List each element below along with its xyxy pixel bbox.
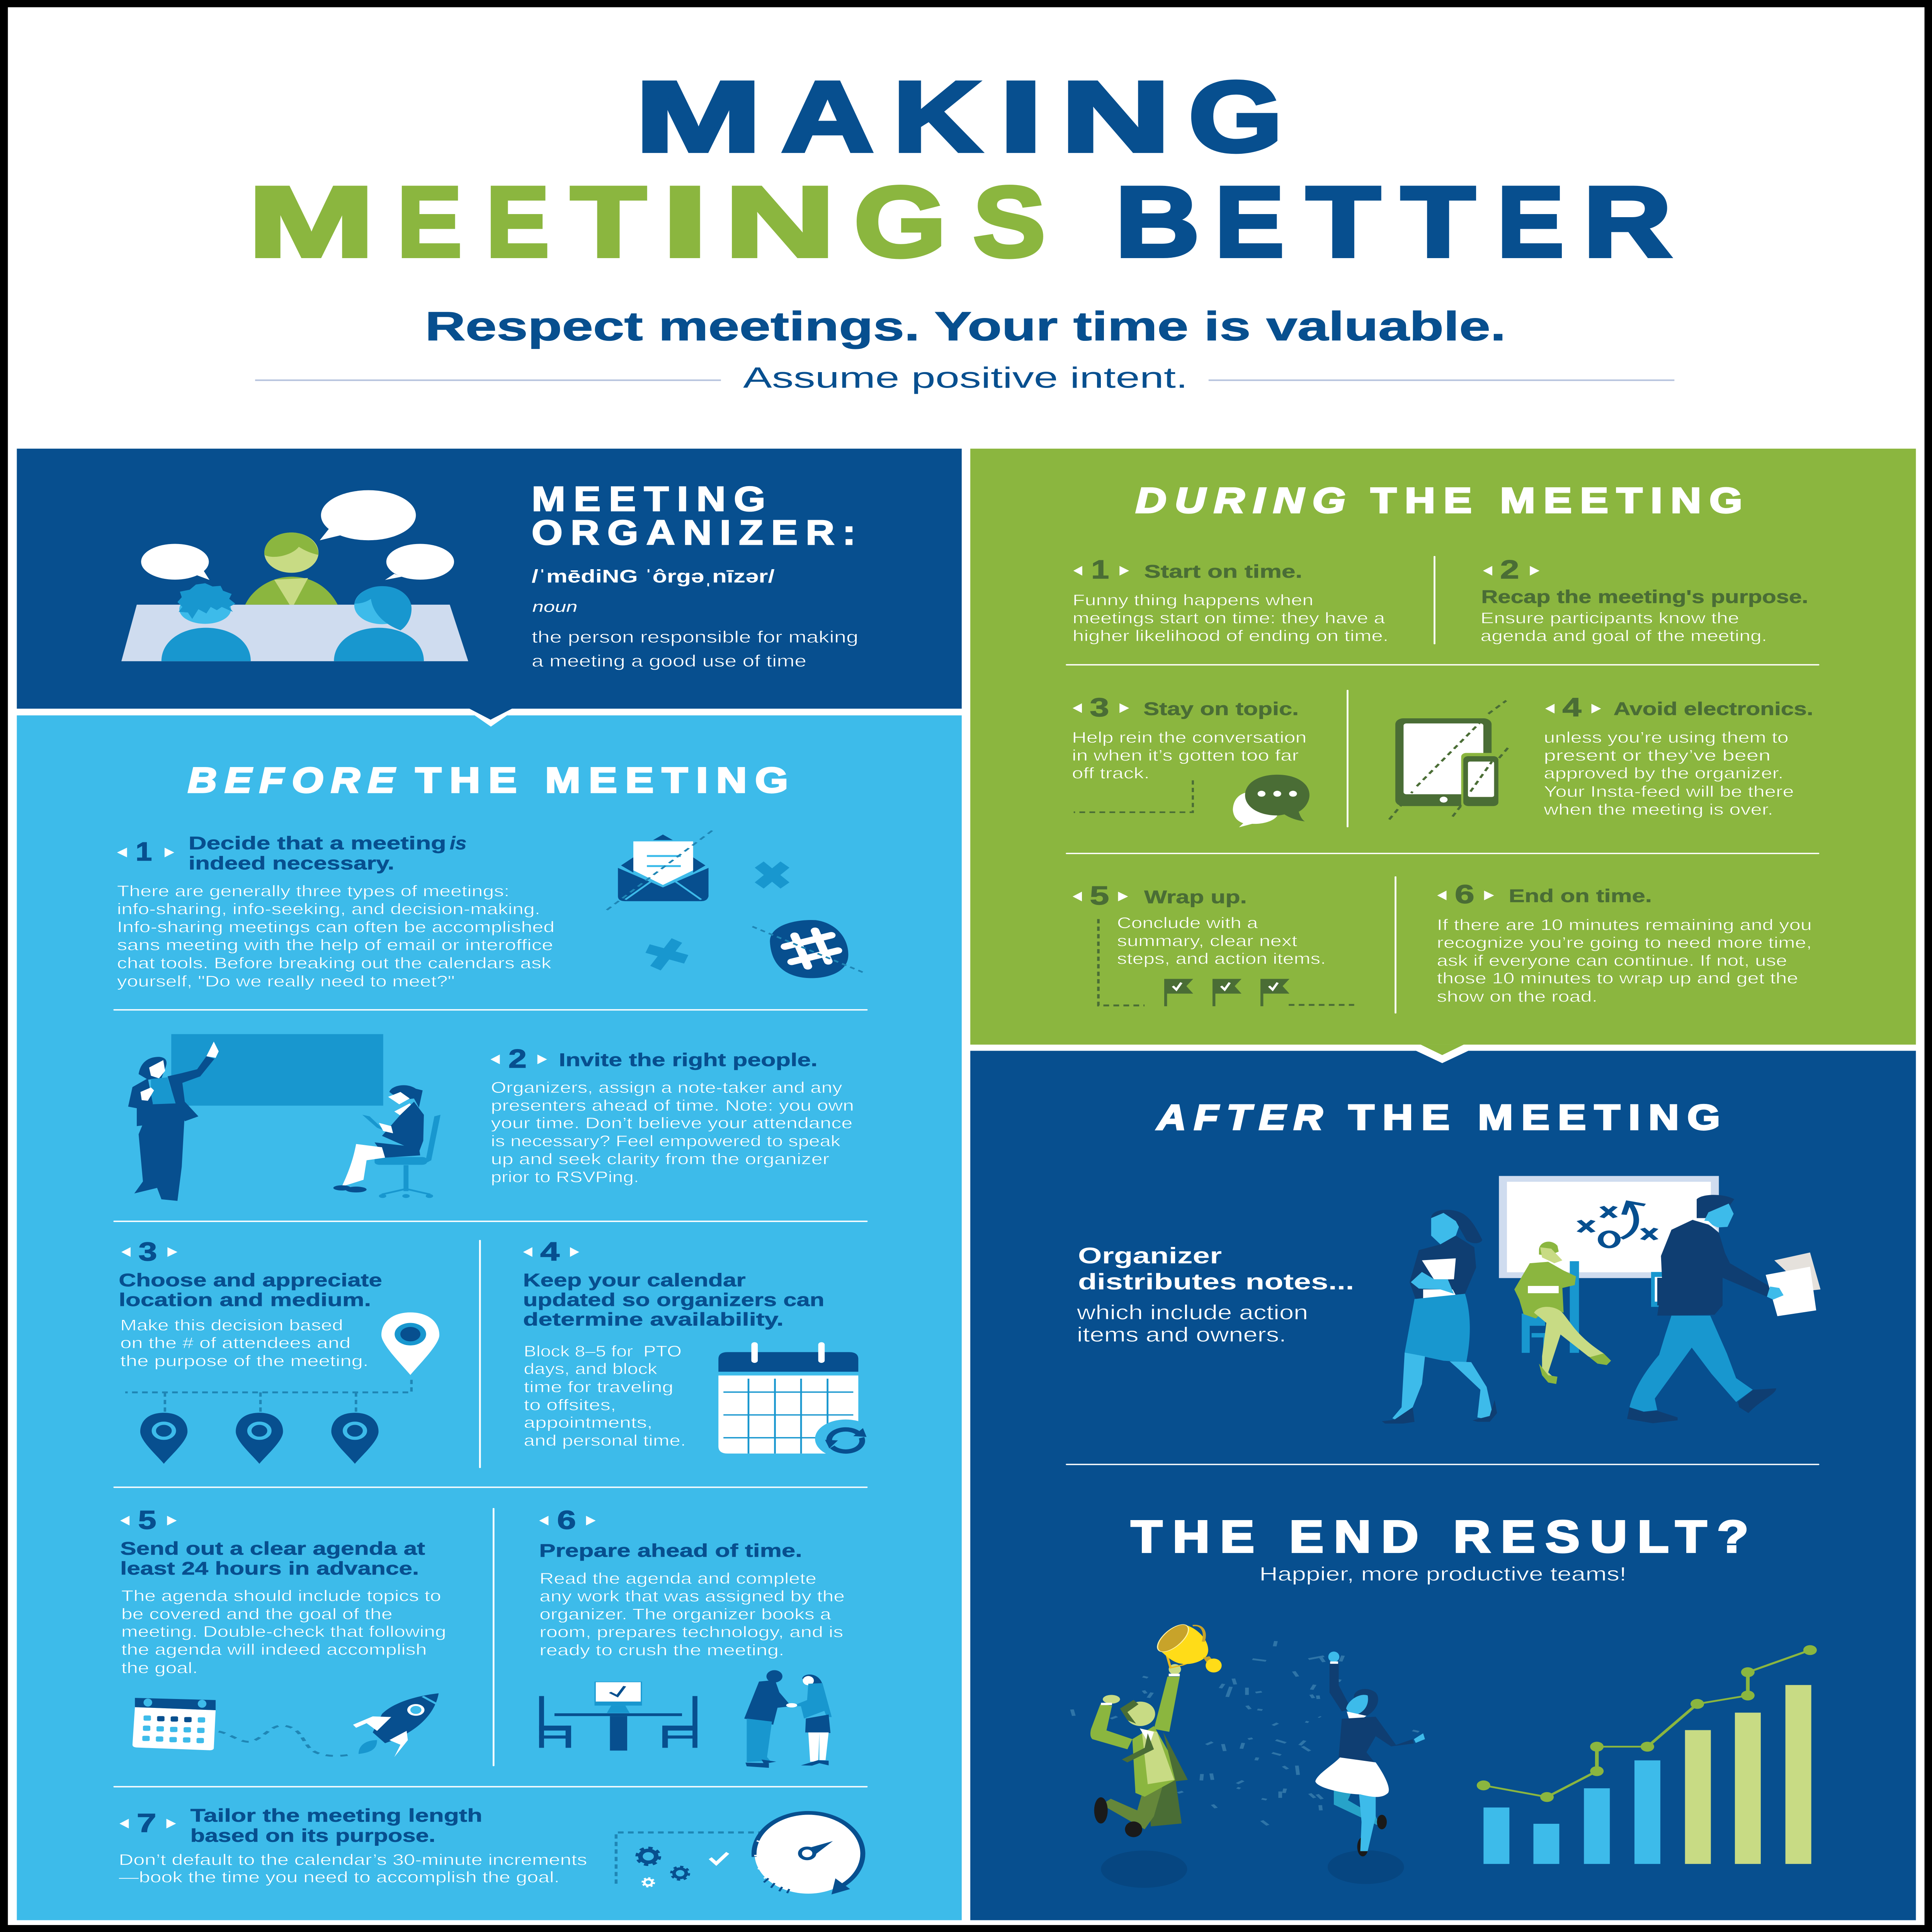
step 2 body: is necessary? Feel empowered to speak <box>491 1133 840 1150</box>
step 1 body: Funny thing happens when <box>1073 592 1313 609</box>
step 4 body: unless you’re using them to <box>1544 729 1789 747</box>
step 2 number <box>490 1044 547 1073</box>
callout heading <box>1078 1243 1354 1294</box>
step 6 body: ask if everyone can continue. If not, use <box>1437 952 1787 969</box>
step 5 number: 5 <box>138 1505 156 1534</box>
step 2 body <box>491 1079 854 1186</box>
end result heading: THE END RESULT? <box>1131 1512 1759 1562</box>
step 6 body: ready to crush the meeting. <box>539 1641 784 1659</box>
step 1 heading: indeed necessary. <box>189 853 394 873</box>
step 6 number: 6 <box>557 1505 576 1534</box>
title: E <box>1497 166 1564 277</box>
illustration: calendar to rocket <box>133 1693 439 1757</box>
step 1 body <box>1073 592 1389 645</box>
step 4 number: 4 <box>540 1237 560 1266</box>
step 4 number: 4 <box>1563 692 1582 722</box>
icon: x mark <box>648 940 686 968</box>
step 4 body: approved by the organizer. <box>1544 765 1784 782</box>
step 5 body <box>121 1587 446 1677</box>
step 2 body: your time. Don’t believe your attendance <box>491 1115 852 1132</box>
callout body <box>1077 1301 1308 1346</box>
step 1 body: info-sharing, info-seeking, and decision-making. <box>117 900 540 918</box>
step 5 heading: Wrap up. <box>1144 887 1247 907</box>
step 7 body: Don’t default to the calendar’s 30-minute increments <box>119 1851 587 1869</box>
step 3 body: on the # of attendees and <box>120 1334 350 1352</box>
step 1 body: meetings start on time: they have a <box>1073 610 1385 627</box>
step 7 number: 7 <box>137 1808 156 1837</box>
title: B <box>1115 166 1200 277</box>
step 5 body: be covered and the goal of the <box>121 1605 393 1623</box>
step 4 body: to offsites, <box>524 1396 616 1414</box>
step 2 body: prior to RSVPing. <box>491 1168 639 1186</box>
step 1 body: higher likelihood of ending on time. <box>1073 627 1389 645</box>
step 4 heading: Avoid electronics. <box>1614 699 1813 719</box>
step 3 heading <box>119 1270 382 1310</box>
step 1 heading: is <box>450 833 466 853</box>
step 5 number <box>120 1505 177 1534</box>
definition heading: ORGANIZER: <box>532 513 864 552</box>
icon: envelope <box>607 829 715 910</box>
step 3 body: Make this decision based <box>120 1316 343 1334</box>
step 3 body: in when it’s gotten too far <box>1072 747 1299 764</box>
step 3 number: 3 <box>138 1237 157 1266</box>
step 7 heading: Tailor the meeting length <box>190 1805 482 1826</box>
step 1 number: 1 <box>1091 555 1109 584</box>
step 2 number: 2 <box>1500 555 1519 584</box>
step 6 body <box>539 1570 845 1659</box>
step 6 body: If there are 10 minutes remaining and you <box>1437 916 1812 934</box>
title: N <box>724 166 835 277</box>
illustration: presenter at board and seated colleague <box>128 1034 440 1201</box>
step 4 body: Your Insta-feed will be there <box>1544 783 1794 800</box>
subtitle: Respect meetings. Your time is valuable. <box>425 304 1506 349</box>
title: A <box>781 61 874 172</box>
definition <box>532 628 858 670</box>
title: G <box>1189 61 1282 172</box>
panel: before the meeting <box>17 709 962 1920</box>
title: T <box>1401 166 1475 277</box>
panel: after the meeting <box>970 1044 1916 1920</box>
icon: x mark <box>759 865 785 886</box>
step 4 body: appointments, <box>524 1414 653 1431</box>
step 1 heading <box>189 833 466 873</box>
step 4 body <box>1543 729 1794 818</box>
step 1 number: 1 <box>136 837 152 866</box>
pointer <box>1416 1044 1468 1063</box>
heading: DURING <box>1136 480 1354 520</box>
title: R <box>1583 166 1672 277</box>
step 1 heading: Start on time. <box>1144 561 1302 582</box>
definition: the person responsible for making <box>532 628 858 646</box>
step 4 body: Block 8–5 for PTO <box>524 1343 682 1360</box>
step 5 body: steps, and action items. <box>1117 950 1326 968</box>
chart: growth bars with trend line <box>1477 1645 1817 1864</box>
step 1 number <box>1073 555 1129 584</box>
step 2 number <box>1483 555 1539 584</box>
icon: calendar with refresh <box>718 1342 877 1458</box>
title: I <box>662 166 708 277</box>
title: E <box>486 166 549 277</box>
step 7 number <box>119 1808 176 1837</box>
step 6 body: any work that was assigned by the <box>539 1588 845 1605</box>
step 6 heading: End on time. <box>1509 886 1652 906</box>
step 2 heading: Recap the meeting's purpose. <box>1481 587 1808 607</box>
step 3 body <box>1072 729 1306 782</box>
title: K <box>893 61 981 172</box>
icon: tablet and phone <box>1389 701 1510 820</box>
end result subheading: Happier, more productive teams! <box>1259 1563 1626 1585</box>
icon: gears and clock <box>616 1813 863 1895</box>
step 3 number <box>1073 692 1129 722</box>
step 5 body: Conclude with a <box>1117 914 1258 932</box>
step 7 heading: based on its purpose. <box>190 1825 435 1846</box>
pointer <box>466 709 515 727</box>
step 3 body: off track. <box>1072 765 1150 782</box>
step 5 body: meeting. Double-check that following <box>121 1623 446 1640</box>
step 5 number <box>1073 881 1128 910</box>
step 3 body: the purpose of the meeting. <box>120 1352 369 1370</box>
title: T <box>1306 166 1380 277</box>
callout heading: Organizer <box>1078 1243 1222 1268</box>
step 1 heading: Decide that a meeting <box>189 833 446 853</box>
step 4 body: when the meeting is over. <box>1543 801 1773 818</box>
step 1 body: There are generally three types of meetings: <box>117 883 510 900</box>
step 7 heading <box>190 1805 482 1846</box>
title: G <box>854 166 946 277</box>
step 1 body: Info-sharing meetings can often be accomplished <box>117 918 554 936</box>
step 2 body: Ensure participants know the <box>1480 610 1739 627</box>
step 3 body: Help rein the conversation <box>1072 729 1306 747</box>
step 2 body: up and seek clarity from the organizer <box>491 1151 830 1168</box>
tagline with rules: Assume positive intent. <box>743 362 1188 394</box>
step 6 heading: Prepare ahead of time. <box>539 1541 802 1561</box>
callout heading: distributes notes... <box>1078 1269 1354 1294</box>
panel: meeting organizer <box>17 449 962 709</box>
step 6 body: recognize you’re going to need more time, <box>1437 934 1812 951</box>
icon: chat hashtag <box>752 920 866 978</box>
heading <box>1136 480 1751 520</box>
heading: AFTER <box>1156 1097 1331 1137</box>
step 3 body <box>120 1316 369 1370</box>
step 4 body: time for traveling <box>524 1378 673 1396</box>
callout body: which include action <box>1077 1301 1308 1324</box>
step 5 body: The agenda should include topics to <box>121 1587 441 1605</box>
step 5 body <box>1117 914 1326 968</box>
heading: BEFORE <box>188 760 403 800</box>
definition heading <box>532 480 864 552</box>
title: E <box>397 166 462 277</box>
step 1 number <box>117 837 174 866</box>
step 5 body: summary, clear next <box>1117 932 1297 950</box>
step 2 number: 2 <box>509 1044 527 1073</box>
illustration: desk and handshake <box>539 1670 832 1768</box>
step 4 heading <box>523 1270 824 1330</box>
step 1 body: chat tools. Before breaking out the calendars ask <box>117 955 551 972</box>
step 7 body <box>119 1851 587 1886</box>
step 6 body: organizer. The organizer books a <box>539 1605 832 1623</box>
step 1 body: yourself, "Do we really need to meet?" <box>117 973 455 990</box>
step 4 body: days, and block <box>524 1361 657 1378</box>
step 2 body: presenters ahead of time. Note: you own <box>491 1097 854 1114</box>
callout body: items and owners. <box>1077 1324 1286 1346</box>
heading <box>1156 1097 1728 1137</box>
step 6 body: room, prepares technology, and is <box>539 1623 843 1641</box>
step 3 heading: location and medium. <box>119 1289 371 1310</box>
step 7 body: —book the time you need to accomplish the goal. <box>119 1869 560 1886</box>
step 6 body: those 10 minutes to wrap up and get the <box>1437 970 1798 987</box>
step 2 body <box>1480 610 1767 645</box>
step 5 number: 5 <box>1090 881 1109 910</box>
illustration: celebrating colleagues with confetti <box>1072 1623 1425 1888</box>
step 6 body: show on the road. <box>1437 988 1597 1005</box>
pronunciation: /ˈmēdiNG ˈôrgəˌnīzər/ <box>532 566 775 587</box>
icon: chat bubbles <box>1074 775 1310 827</box>
step 4 heading: determine availability. <box>523 1309 784 1330</box>
step 6 body <box>1437 916 1812 1005</box>
title: M <box>248 166 374 277</box>
step 6 number: 6 <box>1455 879 1475 909</box>
step 5 heading: least 24 hours in advance. <box>120 1558 419 1578</box>
step 4 number <box>523 1237 579 1266</box>
title: E <box>1215 166 1284 277</box>
icon: map pins <box>125 1313 439 1464</box>
step 1 body: sans meeting with the help of email or interoffice <box>117 936 553 954</box>
step 3 heading: Choose and appreciate <box>119 1270 382 1290</box>
step 1 body <box>117 883 554 990</box>
step 3 number <box>121 1237 177 1266</box>
heading: THE MEETING <box>415 760 796 800</box>
title: S <box>973 166 1046 277</box>
tagline with rules <box>255 362 1674 394</box>
step 4 heading: Keep your calendar <box>523 1270 746 1290</box>
step 4 number <box>1545 692 1601 722</box>
heading <box>188 760 796 800</box>
icon: check flags <box>1099 919 1354 1006</box>
heading: THE MEETING <box>1349 1097 1728 1137</box>
title <box>248 61 1672 277</box>
title: M <box>635 61 762 172</box>
step 5 heading <box>120 1538 425 1578</box>
step 4 body: present or they’ve been <box>1544 747 1770 764</box>
definition: a meeting a good use of time <box>532 651 806 670</box>
step 5 body: the agenda will indeed accomplish <box>121 1641 427 1658</box>
step 3 heading: Stay on topic. <box>1143 699 1299 719</box>
panel: during the meeting <box>970 449 1916 1044</box>
step 2 body: agenda and goal of the meeting. <box>1480 627 1767 645</box>
step 6 body: Read the agenda and complete <box>539 1570 816 1587</box>
title: T <box>571 166 646 277</box>
title: N <box>1061 61 1171 172</box>
part of speech: noun <box>532 599 577 615</box>
step 2 heading: Invite the right people. <box>559 1050 818 1070</box>
step 5 body: the goal. <box>121 1659 198 1677</box>
step 6 number <box>1437 879 1494 909</box>
step 3 number: 3 <box>1090 692 1109 722</box>
step 2 body: Organizers, assign a note-taker and any <box>491 1079 842 1096</box>
illustration: three people at a table <box>121 490 468 661</box>
step 4 heading: updated so organizers can <box>523 1289 824 1310</box>
step 4 body: and personal time. <box>524 1432 686 1449</box>
step 5 heading: Send out a clear agenda at <box>120 1538 425 1559</box>
heading: THE MEETING <box>1371 480 1751 520</box>
title: I <box>999 61 1043 172</box>
step 4 body <box>524 1343 686 1449</box>
definition heading: MEETING <box>532 480 774 519</box>
illustration: people leaving with whiteboard <box>1382 1176 1820 1423</box>
step 6 number <box>539 1505 596 1534</box>
